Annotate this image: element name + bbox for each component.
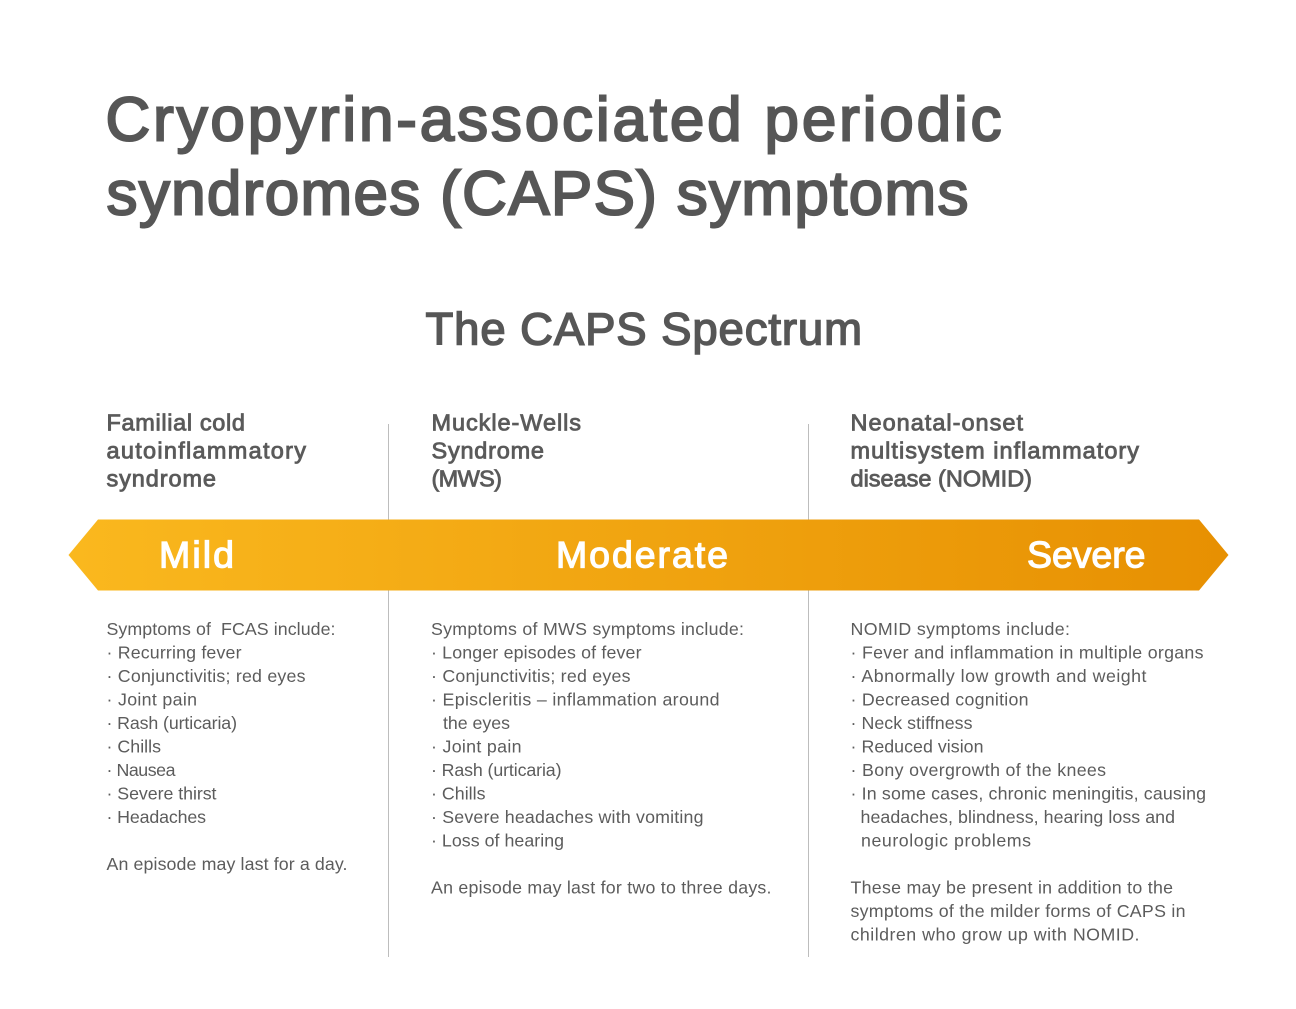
text: FCAS symptoms: · Joint pain [106, 690, 197, 710]
text: NOMID symptoms [850, 619, 1206, 944]
heading: NOMID: Neonatal-onset [850, 410, 1023, 436]
text: FCAS symptoms: · Rash (urticaria) [106, 713, 237, 733]
text: FCAS symptoms [106, 619, 348, 874]
text: NOMID symptoms: neurologic problems [861, 830, 1031, 850]
heading: MWS: (MWS) [432, 466, 502, 492]
text: FCAS symptoms: Symptoms of FCAS include: [106, 619, 336, 639]
subtitle: The CAPS Spectrum [426, 304, 862, 354]
text: FCAS symptoms: · Conjunctivitis; red eyes [106, 666, 306, 686]
text: NOMID symptoms: NOMID symptoms include: [850, 619, 1070, 639]
text: FCAS symptoms: An episode may last for a day. [106, 854, 348, 874]
text: NOMID symptoms: · Decreased cognition [850, 690, 1028, 710]
heading: NOMID: disease (NOMID) [850, 466, 1032, 492]
title: syndromes (CAPS) symptoms [106, 160, 968, 228]
heading: MWS: Syndrome [432, 438, 544, 464]
text: NOMID symptoms: · Neck stiffness [850, 713, 973, 733]
label: Severe: Severe [1027, 534, 1146, 576]
heading: FCAS: syndrome [106, 466, 216, 492]
text: NOMID symptoms: · Abnormally low growth and weight [850, 666, 1147, 686]
text: MWS symptoms: · Severe headaches with vomiting [431, 807, 704, 827]
heading: FCAS: Familial cold [106, 410, 245, 436]
title [106, 86, 1002, 228]
text: NOMID symptoms: headaches, blindness, hearing loss and [860, 807, 1175, 827]
text: MWS symptoms: · Chills [431, 784, 486, 804]
heading: NOMID [850, 410, 1139, 492]
divider left [388, 424, 389, 957]
severity arrow [68, 520, 1228, 590]
heading: FCAS: autoinflammatory [106, 438, 306, 464]
text: NOMID symptoms: · Bony overgrowth of the knees [850, 760, 1106, 780]
text: MWS symptoms: An episode may last for two to three days. [431, 878, 772, 898]
text: MWS symptoms: · Loss of hearing [431, 830, 564, 850]
text: NOMID symptoms: · In some cases, chronic meningitis, causing [850, 784, 1206, 804]
heading: FCAS [106, 410, 306, 492]
text: NOMID symptoms: symptoms of the milder forms of CAPS in [850, 901, 1186, 921]
text: NOMID symptoms: · Fever and inflammation in multiple organs [850, 642, 1204, 662]
text: FCAS symptoms: · Nausea [106, 760, 176, 780]
heading: MWS: Muckle-Wells [432, 410, 581, 436]
text: MWS symptoms: the eyes [443, 713, 510, 733]
text: MWS symptoms: · Rash (urticaria) [431, 760, 562, 780]
text: MWS symptoms: · Conjunctivitis; red eyes [431, 666, 631, 686]
text: FCAS symptoms: · Headaches [106, 807, 206, 827]
text: MWS symptoms [431, 619, 772, 898]
text: NOMID symptoms: children who grow up with NOMID. [850, 924, 1140, 944]
label: Moderate: Moderate [556, 534, 728, 576]
heading: MWS [432, 410, 581, 492]
text: MWS symptoms: · Longer episodes of fever [431, 642, 642, 662]
heading: NOMID: multisystem inflammatory [850, 438, 1139, 464]
text: NOMID symptoms: These may be present in addition to the [850, 878, 1173, 898]
text: MWS symptoms: · Joint pain [431, 736, 522, 756]
text: FCAS symptoms: · Chills [106, 736, 161, 756]
label: Mild: Mild [159, 534, 234, 576]
text: FCAS symptoms: · Recurring fever [106, 642, 242, 662]
text: FCAS symptoms: · Severe thirst [106, 784, 217, 804]
text: MWS symptoms: Symptoms of MWS symptoms include: [431, 619, 744, 639]
divider right [808, 424, 809, 957]
text: MWS symptoms: · Episcleritis – inflammation around [431, 690, 720, 710]
title: Cryopyrin-associated periodic [106, 86, 1002, 154]
text: NOMID symptoms: · Reduced vision [850, 736, 984, 756]
